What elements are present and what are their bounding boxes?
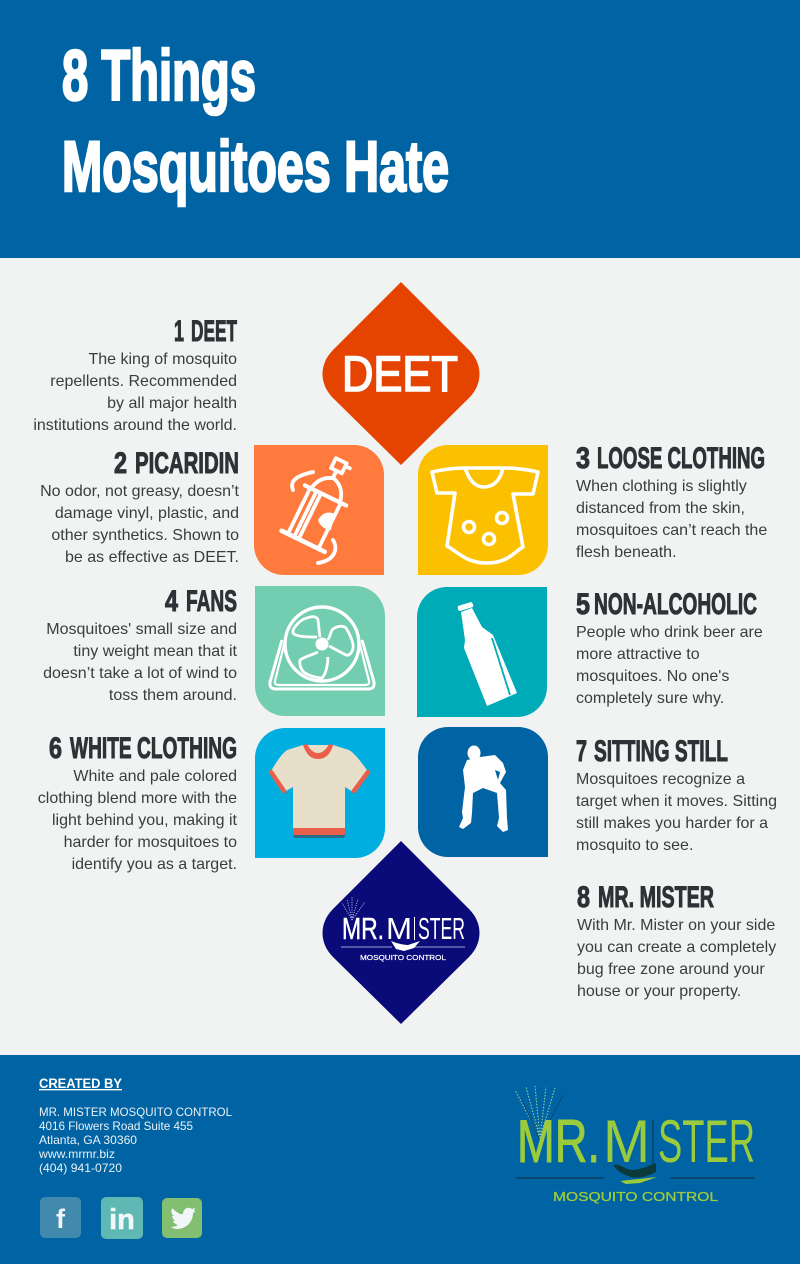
title: 8 Things <box>62 37 256 116</box>
item 6 text: White clothing: light behind you, making it <box>52 812 238 829</box>
contact details <box>38 1105 232 1175</box>
item 5 text: Non-alcoholic: mosquitoes. No one's <box>576 668 729 685</box>
contact details: (404) 941-0720 <box>39 1161 122 1175</box>
footer <box>0 1055 800 1264</box>
item 8 text: Mr. Mister <box>577 881 776 1000</box>
item 3 text: Loose clothing: distanced from the skin, <box>576 500 745 517</box>
contact details: MR. MISTER MOSQUITO CONTROL <box>39 1105 232 1119</box>
item 7 text: Sitting still <box>576 735 777 854</box>
item 3 text: Loose clothing: flesh beneath. <box>576 544 677 561</box>
item 2 text: Picaridin: other synthetics. Shown to <box>51 527 239 544</box>
item 8 text: Mr. Mister: you can create a completely <box>577 939 776 956</box>
icon: linkedin: in <box>109 1204 135 1236</box>
item 1 text: DEET: institutions around the world. <box>33 417 237 434</box>
item 1 text: DEET: repellents. Recommended <box>50 373 237 390</box>
item 4 text: Fans: Mosquitoes' small size and <box>46 621 237 638</box>
item 5 text: Non-alcoholic: completely sure why. <box>576 690 724 707</box>
item 5 text: Non-alcoholic: People who drink beer are <box>576 624 763 641</box>
contact details: 4016 Flowers Road Suite 455 <box>39 1119 193 1133</box>
item 5 text: Non-alcoholic <box>576 588 763 707</box>
item 3 text: Loose clothing: mosquitoes can’t reach the <box>576 522 767 539</box>
item 6 text: White clothing: 6 <box>49 732 62 765</box>
item 4 text: Fans: tiny weight mean that it <box>73 643 238 660</box>
item 6 text: White clothing: harder for mosquitoes to <box>64 834 237 851</box>
created by heading: CREATED BY <box>39 1076 122 1091</box>
contact details: Atlanta, GA 30360 <box>39 1133 137 1147</box>
item 4 text: Fans: 4 <box>165 585 178 618</box>
item 3 text: Loose clothing <box>576 442 767 561</box>
item 8 text: Mr. Mister: bug free zone around your <box>577 961 765 978</box>
item 7 text: Sitting still: mosquito to see. <box>576 837 693 854</box>
Mr. Mister diamond logo: STER <box>418 911 465 946</box>
item 2 text: Picaridin: 2 <box>114 447 127 480</box>
tile: spray can icon <box>254 445 384 575</box>
Mr. Mister diamond logo: M <box>386 911 412 946</box>
item 4 text: Fans <box>43 585 238 704</box>
contact details: www.mrmr.biz <box>38 1147 115 1161</box>
item 1 text: DEET: 1 <box>174 315 184 348</box>
item 8 text: Mr. Mister: MR. MISTER <box>598 881 714 914</box>
tile: bottle icon <box>417 587 547 717</box>
Mr. Mister diamond logo: MR. <box>342 911 384 946</box>
item 2 text: Picaridin: PICARIDIN <box>135 447 239 480</box>
item 4 text: Fans: FANS <box>186 585 237 618</box>
header banner <box>0 0 800 258</box>
item 6 text: White clothing: WHITE CLOTHING <box>70 732 237 765</box>
icon: spray rays <box>515 1086 555 1138</box>
item 7 text: Sitting still: 7 <box>576 735 587 768</box>
item 5 text: Non-alcoholic: more attractive to <box>576 646 700 663</box>
footer Mr. Mister logo <box>515 1086 755 1204</box>
icon: twitter <box>162 1198 202 1238</box>
icon: facebook: f <box>56 1204 66 1234</box>
item 4 text: Fans: toss them around. <box>109 687 237 704</box>
item 1 text: DEET <box>33 315 237 434</box>
item 7 text: Sitting still: SITTING STILL <box>594 735 728 768</box>
Mr. Mister diamond logo: MOSQUITO CONTROL <box>360 953 446 962</box>
item 6 text: White clothing: identify you as a target. <box>72 856 237 873</box>
item 1 text: DEET: The king of mosquito <box>88 351 237 368</box>
item 4 text: Fans: doesn’t take a lot of wind to <box>43 665 237 682</box>
item 6 text: White clothing <box>38 732 238 873</box>
footer Mr. Mister logo: MR. <box>517 1108 600 1175</box>
tile: sitting figure icon <box>418 727 548 857</box>
item 7 text: Sitting still: still makes you harder for a <box>576 815 768 832</box>
icon: linkedin <box>101 1197 143 1239</box>
item 2 text: Picaridin: be as effective as DEET. <box>65 549 239 566</box>
footer Mr. Mister logo: MOSQUITO CONTROL <box>553 1189 718 1204</box>
item 5 text: Non-alcoholic: 5 <box>576 588 590 621</box>
DEET diamond: DEET <box>342 346 458 402</box>
DEET diamond <box>322 282 480 465</box>
title: Mosquitoes Hate <box>62 128 449 207</box>
Mr. Mister diamond logo <box>322 841 480 1024</box>
item 1 text: DEET: DEET <box>191 315 237 348</box>
footer Mr. Mister logo: M <box>603 1108 650 1175</box>
tile: white t-shirt icon <box>255 728 385 858</box>
item 3 text: Loose clothing: When clothing is slightly <box>576 478 747 495</box>
icon: facebook <box>40 1197 81 1238</box>
item 3 text: Loose clothing: 3 <box>576 442 590 475</box>
item 8 text: Mr. Mister: 8 <box>577 881 590 914</box>
item 6 text: White clothing: clothing blend more with the <box>38 790 237 807</box>
item 7 text: Sitting still: target when it moves. Sitting <box>576 793 777 810</box>
tile: fan icon <box>255 586 385 716</box>
item 1 text: DEET: by all major health <box>107 395 237 412</box>
item 6 text: White clothing: White and pale colored <box>73 768 237 785</box>
icon: spray rays <box>342 897 365 920</box>
tile: loose shirt icon <box>418 445 548 575</box>
item 8 text: Mr. Mister: house or your property. <box>577 983 741 1000</box>
item 2 text: Picaridin <box>40 447 240 566</box>
icon: mosquito plane <box>613 1163 656 1178</box>
item 8 text: Mr. Mister: With Mr. Mister on your side <box>577 917 775 934</box>
title <box>62 37 449 207</box>
item 7 text: Sitting still: Mosquitoes recognize a <box>576 771 745 788</box>
item 2 text: Picaridin: No odor, not greasy, doesn’t <box>40 483 240 500</box>
item 2 text: Picaridin: damage vinyl, plastic, and <box>55 505 239 522</box>
